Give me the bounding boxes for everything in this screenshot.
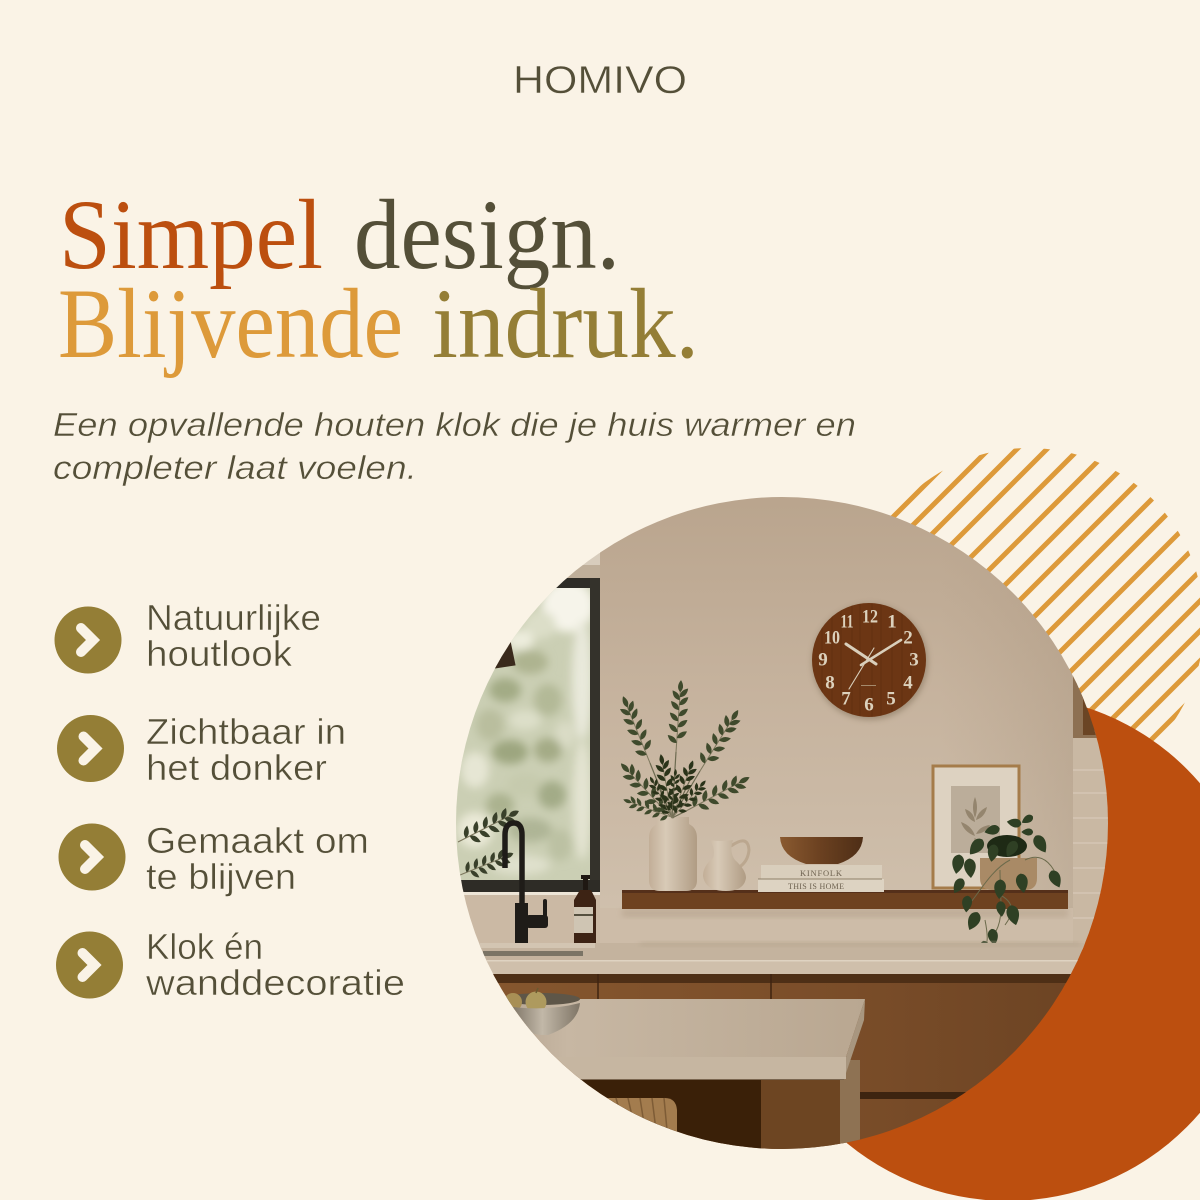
- wooden bowl: [780, 837, 863, 864]
- decorative orange circle: [755, 695, 1200, 1200]
- title: [58, 179, 699, 379]
- feature: Gemaakt om te blijven: [58, 820, 369, 897]
- feature label: te blijven: [146, 856, 296, 897]
- fruit bowl: [504, 988, 580, 1035]
- icon: chevron badge: [54, 606, 122, 674]
- trailing vine plant: [952, 814, 1061, 943]
- window view: [456, 588, 590, 880]
- island base: [580, 1060, 860, 1149]
- feature label: Natuurlijke: [146, 597, 321, 638]
- icon: chevron badge: [56, 932, 123, 998]
- clock numerals: 5: [886, 688, 896, 710]
- base cabinets: [493, 974, 1071, 1149]
- feature: Klok en wanddecoratie: [56, 926, 405, 1003]
- kitchen photo circle: [440, 490, 1120, 1174]
- clock numerals: 9: [818, 650, 828, 670]
- island countertop: [512, 999, 865, 1080]
- feature label: Klok én: [146, 926, 263, 967]
- feature label: [146, 597, 321, 674]
- upper cabinet: [1073, 676, 1097, 738]
- subtitle: [53, 406, 856, 486]
- feature label: het donker: [146, 747, 327, 788]
- wall: [600, 497, 1080, 908]
- stacked books: [758, 865, 884, 892]
- vine pot: [980, 858, 1037, 890]
- framed art: [933, 766, 1019, 888]
- feature label: Gemaakt om: [146, 820, 369, 861]
- feature label: [145, 926, 405, 1003]
- wall below window: [464, 895, 600, 944]
- clock numerals: 7: [841, 688, 851, 710]
- shelf: [622, 890, 1068, 917]
- feature: Natuurlijke houtlook: [54, 597, 321, 674]
- kitchen counter: [440, 942, 1120, 974]
- woven stool: [607, 1098, 677, 1132]
- feature label: [146, 820, 369, 897]
- clock numerals: 4: [903, 672, 913, 694]
- clock numerals: 12: [862, 606, 878, 628]
- clock numerals: 8: [825, 672, 835, 694]
- title word: indruk.: indruk.: [432, 268, 699, 379]
- window head and frame: [461, 553, 600, 895]
- clock numerals: [818, 606, 919, 716]
- tile wall: [1073, 730, 1108, 950]
- feature label: wanddecoratie: [145, 962, 405, 1003]
- feature label: [146, 711, 346, 788]
- stacked books: THIS IS HOME: [788, 882, 844, 891]
- soap bottle: [574, 875, 596, 943]
- subtitle: completer laat voelen.: [53, 449, 417, 486]
- ceramic vase: [649, 817, 697, 891]
- feature: Zichtbaar in het donker: [57, 711, 346, 788]
- olive branches by the window: [458, 808, 519, 878]
- clock numerals: 3: [909, 650, 919, 670]
- title word: Blijvende: Blijvende: [58, 268, 403, 379]
- clock: [812, 600, 928, 720]
- clock numerals: 1: [887, 612, 897, 632]
- decorative striped circle: [890, 448, 1200, 741]
- title word: design.: design.: [354, 179, 620, 290]
- clock numerals: 10: [824, 628, 840, 648]
- clock numerals: 2: [903, 628, 913, 648]
- clock numerals: 6: [864, 694, 874, 716]
- stacked books: KINFOLK: [800, 868, 843, 878]
- icon: chevron badge: [57, 715, 124, 782]
- feature label: Zichtbaar in: [146, 711, 346, 752]
- clock hands: [846, 640, 901, 689]
- feature list: [54, 597, 405, 1003]
- faucet: [505, 823, 548, 943]
- subtitle: Een opvallende houten klok die je huis warmer en: [53, 406, 856, 443]
- title word: Simpel: Simpel: [59, 179, 323, 290]
- olive branches in vase: [620, 680, 750, 820]
- ceramic jug: [703, 840, 749, 891]
- clock numerals: 11: [840, 612, 854, 632]
- icon: chevron badge: [58, 824, 126, 890]
- feature label: houtlook: [146, 633, 293, 674]
- brand logo: HOMIVO: HOMIVO: [513, 59, 687, 102]
- pendant lamp: [495, 641, 515, 668]
